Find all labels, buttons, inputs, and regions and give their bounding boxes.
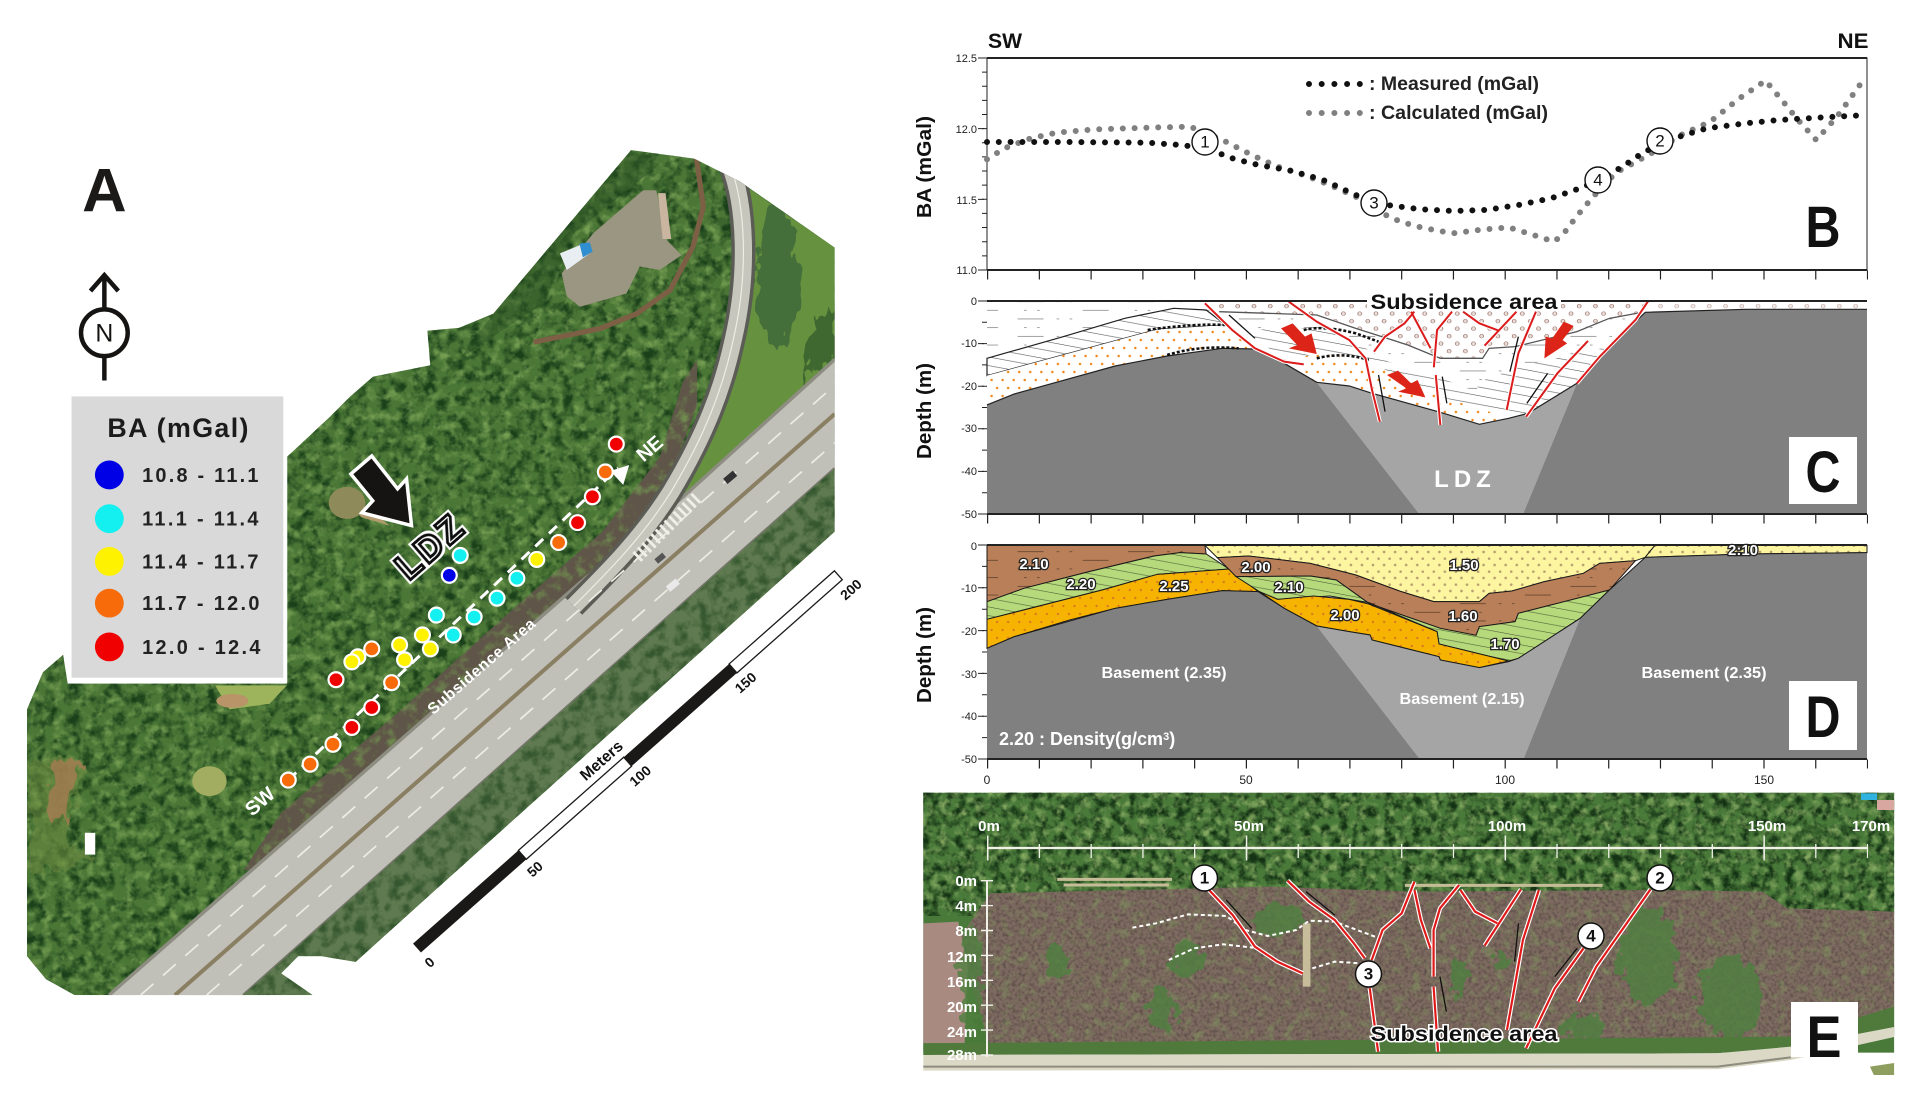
numbered markers 1 to 4: 3 [1369,194,1379,212]
y-axis tick labels: -10 [961,583,977,595]
y-axis tick labels [961,296,977,521]
vertical scale labels: 28m [947,1047,977,1064]
density labels: 1.70 [1490,636,1520,653]
vertical scale labels [947,873,977,1064]
legend: measured and calculated: : Measured (mGal) [1369,74,1539,95]
vertical scale labels: 20m [947,999,977,1016]
map labels SW, NE, Subsidence Area: NE [632,432,668,466]
y-axis tick labels: -30 [961,669,977,681]
legend: BA (mGal): 10.8 - 11.1 [142,465,258,487]
panel A: aerial map [23,147,865,996]
legend: BA (mGal) [68,396,287,683]
density labels: 2.00 [1241,559,1271,576]
legend: BA (mGal): 11.7 - 12.0 [142,593,259,615]
x-axis tick labels: 0 [984,773,991,787]
horizontal scale [987,848,1868,851]
panel E: annotated photograph of the slope [923,793,1894,1075]
density labels: 2:10 [1728,542,1758,559]
LDZ label: LDZ [1434,466,1496,493]
numbered markers 1 to 4 [1192,128,1673,216]
panel letter C [1789,437,1857,505]
y-axis tick labels: -50 [961,509,977,521]
vertical scale labels: 0m [955,873,977,890]
numbered markers 1 to 4: 3 [1364,964,1373,984]
vertical scale labels: 24m [947,1024,977,1041]
panel letter E [1791,1002,1858,1070]
y-axis tick labels: 0 [971,296,977,308]
numbered markers 1 to 4: 2 [1655,132,1665,150]
panel letter D: D [1806,685,1840,750]
density labels: 1.60 [1448,608,1478,625]
panel D: density model [914,541,1868,787]
legend: measured and calculated: : Calculated (mGal) [1369,103,1548,124]
density key: ) [1169,729,1175,749]
panel letter C: C [1806,440,1840,505]
y-axis tick labels: 11.5 [956,195,977,207]
arrow pointing at LDZ [351,456,412,526]
y-axis tick labels: -40 [961,711,977,723]
density key: 3 [1163,731,1169,743]
x-axis tick labels: 50 [1239,773,1253,787]
scale bar in meters: 100 [626,762,654,789]
scale bar in meters: 50 [524,858,546,880]
slope photograph [923,793,1894,1075]
survey line with arrow [288,465,629,780]
white dashed bedding traces [1132,914,1379,968]
y-axis tick labels [956,53,977,277]
y-axis tick labels: -10 [961,338,977,350]
density key: 2.20 : Density(g/cm [999,729,1163,749]
legend: BA (mGal): 11.4 - 11.7 [142,551,258,573]
horizontal scale labels [978,818,1890,835]
y-axis title: Depth (m) [914,363,936,459]
y-axis tick labels: 12.5 [956,53,977,65]
panel B: Bouguer anomaly chart [914,30,1868,277]
legend: measured and calculated [1309,74,1548,124]
y-axis tick labels [961,541,977,766]
panel C: interpreted geological section [914,291,1868,521]
map annotations [68,157,865,971]
red movement arrows [1281,322,1574,397]
x-axis tick labels: 100 [1495,773,1515,787]
Subsidence area label: Subsidence area [1370,1023,1558,1046]
frame and ticks [981,544,1868,764]
density labels: 2.10 [1019,556,1049,573]
vertical scale labels: 4m [955,898,977,915]
faults in red [1205,301,1648,425]
x-axis tick labels [984,773,1774,787]
map labels SW, NE, Subsidence Area [241,432,668,821]
vertical scale [986,880,988,1057]
y-axis tick labels: -20 [961,626,977,638]
aerial photograph of the slope and highway [23,147,838,996]
y-axis tick labels: -40 [961,466,977,478]
SW and NE labels: SW [988,30,1022,53]
y-axis title: BA (mGal) [914,116,936,218]
numbered markers 1 to 4 [1192,865,1673,987]
scale bar in meters: 200 [837,576,865,603]
numbered markers 1 to 4: 4 [1586,926,1596,946]
panel letter A: A [82,157,127,226]
scale bar in meters: 150 [732,669,760,696]
panel letter D [1789,681,1857,750]
panel letter B: B [1806,195,1840,260]
map labels SW, NE, Subsidence Area: Subsidence Area [425,615,539,718]
SW and NE labels: NE [1838,30,1868,53]
north arrow: N [95,321,113,348]
numbered markers 1 to 4: 4 [1593,170,1603,190]
y-axis tick labels: 12.0 [956,124,977,136]
Subsidence area heading: Subsidence area [1370,291,1558,314]
basement labels [1102,665,1766,708]
density labels [1019,542,1758,653]
y-axis tick labels: -20 [961,381,977,393]
panel letter E: E [1806,1005,1842,1070]
density layers [987,545,1867,759]
y-axis title: Depth (m) [914,607,936,703]
measured curve [987,115,1867,211]
y-axis tick labels: 11.0 [956,265,977,277]
LDZ label: LDZ [388,506,473,587]
legend: BA (mGal): 12.0 - 12.4 [142,637,260,659]
horizontal scale labels: 50m [1234,818,1264,835]
legend: BA (mGal): BA (mGal) [107,413,249,443]
horizontal scale labels: 100m [1488,818,1526,835]
calculated curve [987,81,1860,242]
section layers [987,301,1867,514]
vertical scale labels: 16m [947,974,977,991]
SW and NE labels [988,30,1868,53]
chart frame and ticks [981,58,1868,275]
density labels: 2.20 [1066,576,1096,593]
density labels: 2.10 [1274,579,1304,596]
basement labels: Basement (2.15) [1400,691,1524,708]
faults in red [1209,881,1651,1052]
y-axis tick labels: 0 [971,541,977,553]
frame and ticks [981,300,1868,519]
y-axis tick labels: -30 [961,423,977,435]
basement labels: Basement (2.35) [1102,665,1226,682]
vertical scale labels: 12m [947,949,977,966]
density labels: 1.50 [1449,557,1479,574]
x-axis tick labels: 150 [1754,773,1774,787]
scale bar in meters: 0 [421,953,438,971]
north arrow [81,275,128,380]
y-axis tick labels: -50 [961,754,977,766]
density labels: 2.25 [1159,578,1189,595]
density labels: 2.00 [1330,607,1360,624]
basement labels: Basement (2.35) [1642,665,1766,682]
horizontal scale labels: 170m [1852,818,1890,835]
horizontal scale labels: 150m [1748,818,1786,835]
numbered markers 1 to 4: 2 [1655,868,1665,888]
scale bar in meters [397,548,865,971]
legend: BA (mGal): 11.1 - 11.4 [142,509,258,531]
map labels SW, NE, Subsidence Area: SW [241,783,280,821]
gravity stations [281,437,624,788]
numbered markers 1 to 4: 1 [1200,868,1209,888]
numbered markers 1 to 4: 1 [1200,132,1210,152]
scale bar in meters: Meters [577,738,627,784]
vertical scale labels: 8m [955,923,977,940]
horizontal scale labels: 0m [978,818,1000,835]
